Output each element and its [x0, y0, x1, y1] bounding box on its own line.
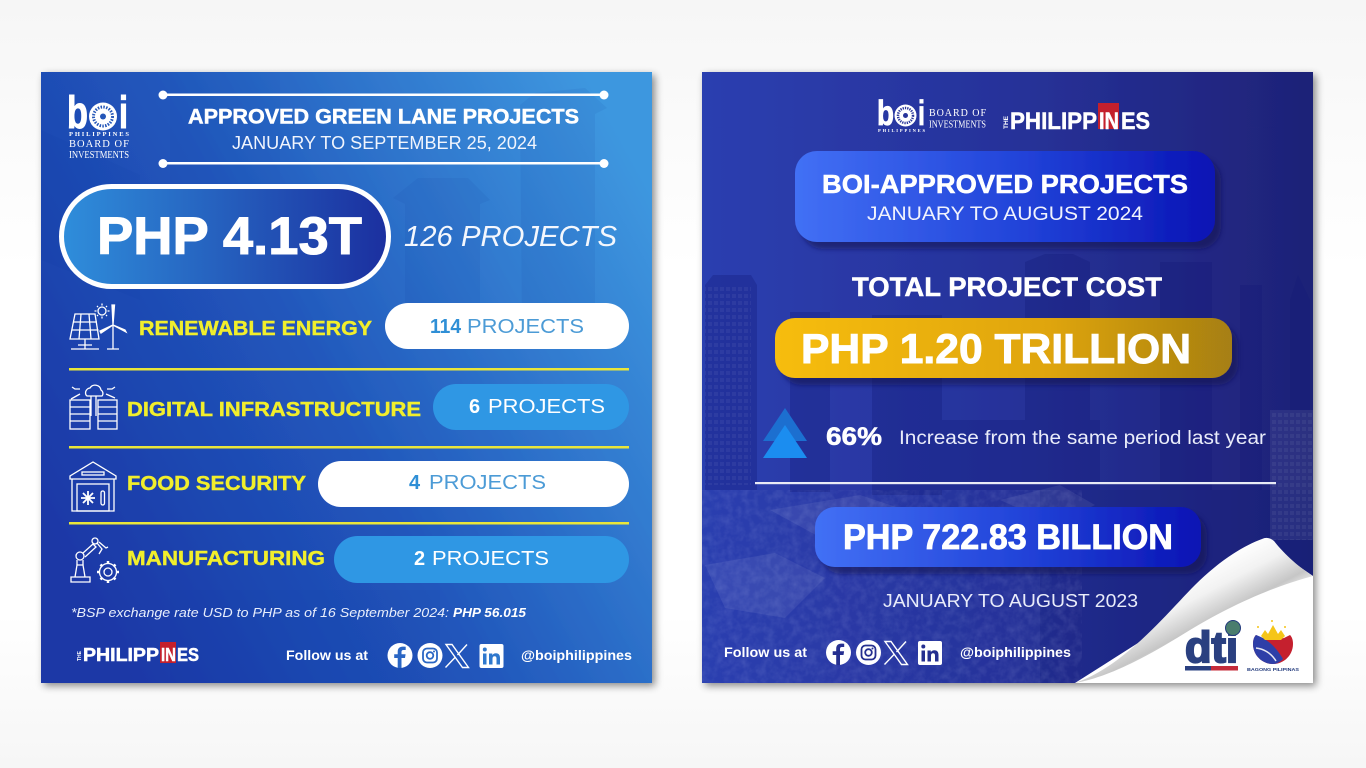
logo: boi board of investments: o — [95, 93, 117, 137]
logo: the philippines — [1003, 103, 1150, 135]
logo: bagong pilipinas — [1247, 620, 1299, 672]
row: food security — [70, 461, 629, 511]
gold value pill — [775, 318, 1232, 378]
row: renewable energy — [70, 303, 629, 349]
logo: the philippines: PHILIPP — [1010, 108, 1097, 135]
footnote: exchange rate: PHP 56.015 — [453, 605, 527, 620]
icon: robot arm and gear — [71, 538, 119, 583]
total value pill — [62, 186, 388, 286]
label: DIGITAL INFRASTRUCTURE — [127, 399, 421, 421]
value pill — [433, 384, 629, 430]
value pill: 6 — [469, 396, 480, 418]
icon: facebook — [388, 643, 412, 668]
value pill: 2 — [414, 548, 425, 570]
icon: x — [446, 644, 468, 668]
logo: boi board of investments: PHILIPPINES — [69, 131, 129, 138]
logo: boi board of investments: BOARD OF — [929, 108, 986, 119]
logo: boi board of investments: i — [119, 87, 128, 138]
header rule top — [158, 90, 608, 100]
subheading: date range: JANUARY TO SEPTEMBER 25, 2024 — [232, 133, 537, 153]
follow us label: Follow us at — [286, 648, 369, 663]
icon: cold storage — [70, 462, 116, 511]
value pill: 4 — [409, 472, 421, 494]
value pill: PROJECTS — [467, 316, 584, 338]
icon: facebook — [826, 640, 851, 665]
heading: approved green lane projects: APPROVED GREEN LANE PROJECTS — [188, 104, 579, 128]
increase description: Increase from the same period last year — [899, 428, 1267, 449]
header rule bottom — [158, 159, 608, 168]
logo: bagong pilipinas: BAGONG PILIPINAS — [1247, 667, 1299, 672]
icon: up arrows — [763, 408, 807, 458]
logo: the philippines: PHILIPP — [83, 645, 159, 665]
panel: approved green lane projects — [41, 72, 652, 683]
page curl corner — [1075, 538, 1313, 683]
heading: boi-approved projects: BOI-APPROVED PROJECTS — [822, 169, 1188, 199]
logo: the philippines: ES — [1121, 108, 1150, 135]
logo: boi board of investments: i — [918, 94, 925, 133]
logo: the philippines — [77, 642, 199, 665]
panel: boi-approved projects — [702, 72, 1313, 683]
social icons — [388, 643, 504, 668]
icon: linkedin — [480, 644, 504, 668]
label: FOOD SECURITY — [127, 473, 307, 495]
follow us label: Follow us at — [724, 645, 808, 660]
heading: total project cost: TOTAL PROJECT COST — [852, 272, 1163, 302]
prior year value pill: PHP 722.83 BILLION — [843, 518, 1173, 557]
row: manufacturing — [71, 536, 629, 583]
logo: the philippines: ES — [177, 645, 199, 665]
logo: boi board of investments: b — [67, 87, 88, 138]
logo: boi board of investments: INVESTMENTS — [929, 120, 986, 130]
logo: boi board of investments — [877, 94, 986, 133]
logo: the philippines: IN — [161, 645, 176, 665]
row: digital infrastructure — [70, 384, 629, 430]
logo: boi board of investments: BOARD OF — [69, 139, 129, 150]
subheading: date range: JANUARY TO AUGUST 2024 — [867, 204, 1143, 225]
value pill — [318, 461, 629, 507]
value pill: 114 — [430, 316, 462, 338]
icon: instagram — [856, 640, 881, 665]
logo: boi board of investments: PHILIPPINES — [878, 128, 925, 133]
value pill — [334, 536, 629, 583]
icon: servers and cloud — [70, 385, 117, 429]
logo: dti: dti — [1185, 623, 1238, 672]
logo: the philippines: THE — [1003, 115, 1010, 129]
logo: the philippines: IN — [1099, 108, 1119, 135]
social handle: @boiphilippines — [521, 648, 632, 663]
total value pill: PHP 4.13T — [97, 207, 362, 266]
prior year value pill — [815, 507, 1201, 567]
label: MANUFACTURING — [127, 548, 325, 570]
icon: linkedin — [918, 641, 942, 665]
project total: 126 PROJECTS — [404, 221, 618, 253]
city skyline backdrop — [702, 254, 1313, 683]
value pill — [385, 303, 629, 349]
social handle: @boiphilippines — [960, 645, 1071, 660]
logo: boi board of investments: b — [877, 94, 894, 133]
icon: solar panel and wind turbine — [70, 304, 126, 349]
value pill: PROJECTS — [432, 548, 549, 570]
logo: boi board of investments — [67, 87, 129, 161]
logo: the philippines: THE — [77, 650, 83, 661]
logo: boi board of investments: INVESTMENTS — [69, 150, 129, 161]
title pill — [795, 151, 1215, 242]
value pill: PROJECTS — [429, 472, 546, 494]
gold value pill: PHP 1.20 TRILLION — [801, 325, 1191, 372]
increase percentage: 66% — [826, 423, 882, 451]
icon: instagram — [418, 643, 442, 668]
value pill: PROJECTS — [488, 396, 605, 418]
logo: boi board of investments: o — [898, 96, 914, 132]
social icons — [826, 640, 942, 665]
footnote: exchange rate: *BSP exchange rate USD to PHP as of 16 September 2024: — [71, 605, 449, 620]
label: RENEWABLE ENERGY — [139, 318, 373, 340]
prior year date range: JANUARY TO AUGUST 2023 — [883, 591, 1138, 611]
icon: x — [884, 642, 908, 664]
